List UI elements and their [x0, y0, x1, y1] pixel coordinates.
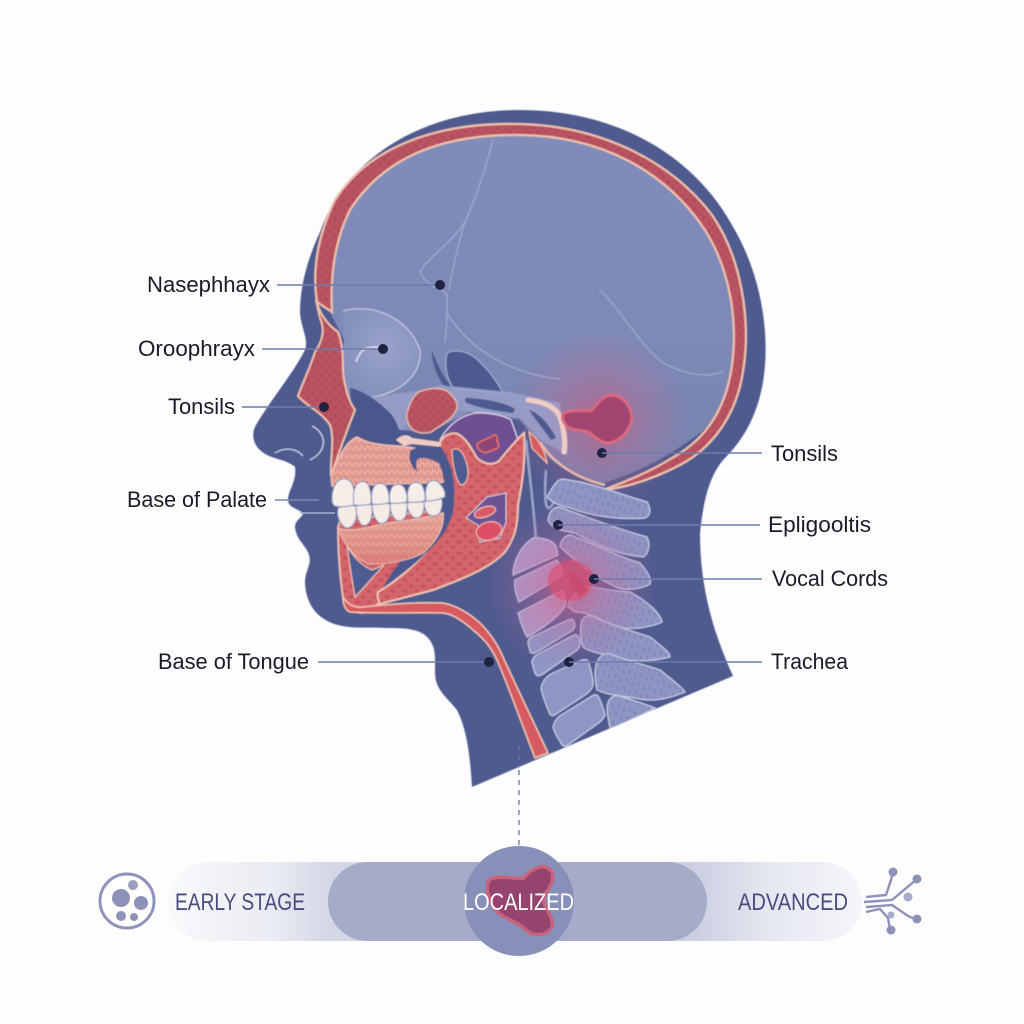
label: Tonsils left: Tonsils — [168, 394, 235, 419]
label: Trachea: Trachea — [771, 649, 849, 674]
label: Base of Tongue: Base of Tongue — [158, 649, 309, 674]
tumour blob — [487, 867, 553, 935]
label: Vocal Cords: Vocal Cords — [772, 566, 888, 591]
lower jaw triangular gap — [347, 545, 384, 597]
cream hook process — [528, 400, 565, 452]
vertebral bodies — [513, 538, 605, 746]
head silhouette — [253, 110, 766, 787]
label: Tonsils left — [168, 394, 329, 419]
tongue mass — [378, 433, 525, 604]
vocal cord tumour — [549, 561, 594, 600]
upper gum — [331, 437, 445, 486]
head and neck illustration — [253, 110, 766, 787]
spinous processes — [547, 479, 685, 730]
sinus — [407, 388, 457, 433]
localized pill — [328, 862, 707, 941]
text: localized: LOCALIZED — [463, 889, 574, 916]
icon: early stage cells — [100, 874, 154, 928]
label: Base of Tongue — [158, 649, 494, 674]
tumour in pharynx — [477, 435, 499, 453]
icon: advanced spreading network — [864, 868, 922, 934]
central circle — [464, 846, 574, 956]
posterior tumour — [562, 395, 632, 443]
hyoid cavity — [466, 493, 506, 542]
label: Oroophrayx — [138, 336, 388, 361]
lower jaw — [338, 510, 443, 613]
text: early stage: EARLY STAGE — [175, 889, 305, 916]
skull base edge — [540, 442, 605, 485]
dashed connector to stage bar — [518, 745, 520, 845]
label: Trachea — [564, 649, 849, 674]
label: Vocal Cords — [589, 566, 888, 591]
orbit highlight — [356, 347, 385, 362]
spine group — [486, 479, 685, 746]
cavity tissue upper — [473, 504, 497, 520]
lower gum shading — [338, 513, 443, 564]
pink glow behind skull base — [512, 332, 688, 508]
cavity tissue lower — [474, 519, 504, 543]
airway strands — [526, 440, 555, 566]
text: advanced: ADVANCED — [738, 889, 848, 916]
nostril lines — [275, 426, 323, 460]
oesophagus tube — [343, 597, 548, 758]
orbit — [342, 309, 420, 397]
nasal cavity — [350, 388, 400, 447]
narrow air passage — [432, 350, 453, 388]
glow around vocal cords — [496, 512, 648, 661]
outer pill — [168, 862, 862, 941]
skull base band — [372, 385, 568, 455]
skull cavity — [330, 130, 738, 483]
nasal floor detail — [396, 435, 442, 447]
vocal cord fold — [576, 584, 588, 596]
pharynx wall — [529, 432, 547, 463]
nasal bone — [298, 300, 355, 476]
label: Epligooltis: Epligooltis — [768, 512, 871, 537]
lower teeth — [338, 499, 442, 528]
airway opening in tongue — [452, 449, 468, 485]
skull bone band — [315, 124, 746, 490]
pharynx space — [440, 413, 520, 470]
label: Tonsils right — [597, 441, 838, 466]
lower gum — [338, 513, 443, 564]
label: Base of Palate: Base of Palate — [127, 487, 267, 512]
label: Nasephhayx — [147, 272, 445, 297]
label: Oroophrayx: Oroophrayx — [138, 336, 255, 361]
orbit rim — [343, 309, 420, 397]
cranial suture lines — [420, 140, 723, 379]
label: Tonsils right: Tonsils — [771, 441, 838, 466]
label: Nasephhayx: Nasephhayx — [147, 272, 270, 297]
label: Epligooltis — [553, 512, 871, 537]
sphenoid sinus — [446, 351, 503, 393]
skull base slits — [465, 398, 556, 440]
stage progression bar — [168, 846, 862, 956]
upper teeth — [332, 479, 445, 507]
navy gap between gum and tongue — [383, 446, 454, 588]
navy hook above gum — [409, 448, 443, 472]
